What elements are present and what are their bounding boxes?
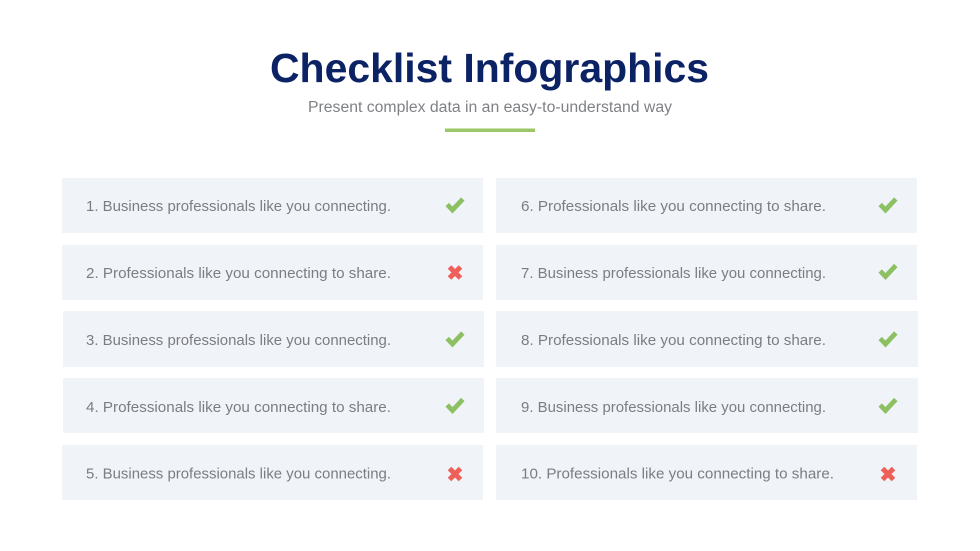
panel: item 3 — [63, 311, 484, 367]
panel: item 6: 6. Professionals like you connecting to share. — [521, 198, 826, 215]
panel: item 7 — [496, 245, 917, 300]
panel: item 1 — [62, 178, 483, 233]
panel: item 7: 7. Business professionals like you connecting. — [521, 265, 826, 282]
panel: item 4 — [63, 378, 484, 433]
icon: check — [447, 333, 463, 344]
panel: item 10: 10. Professionals like you connecting to share. — [521, 466, 834, 482]
icon: cross — [882, 468, 894, 480]
icon: check — [880, 266, 896, 276]
icon: check — [447, 400, 463, 410]
panel: item 5: 5. Business professionals like you connecting. — [86, 466, 391, 482]
icon: check — [880, 400, 896, 410]
panel: item 2 — [62, 245, 483, 300]
title: Checklist Infographics — [270, 45, 709, 91]
subtitle: Present complex data in an easy-to-understand way — [308, 99, 672, 116]
panel: item 1: 1. Business professionals like you connecting. — [86, 198, 391, 215]
title underline — [445, 128, 535, 132]
panel: item 9: 9. Business professionals like you connecting. — [521, 399, 826, 416]
panel: item 4: 4. Professionals like you connecting to share. — [86, 399, 391, 416]
icon: cross — [450, 468, 460, 480]
icon: check — [880, 199, 896, 210]
icon: check — [880, 333, 896, 344]
icon: check — [447, 199, 463, 210]
panel: item 5 — [62, 445, 483, 500]
panel: item 6 — [496, 178, 917, 233]
panel: item 2: 2. Professionals like you connecting to share. — [86, 265, 391, 282]
panel: item 3: 3. Business professionals like you connecting. — [86, 332, 391, 349]
panel: item 10 — [496, 445, 917, 500]
panel: item 8: 8. Professionals like you connecting to share. — [521, 332, 826, 349]
panel: item 8 — [496, 311, 918, 367]
panel: item 9 — [496, 378, 918, 433]
icon: cross — [450, 267, 460, 278]
